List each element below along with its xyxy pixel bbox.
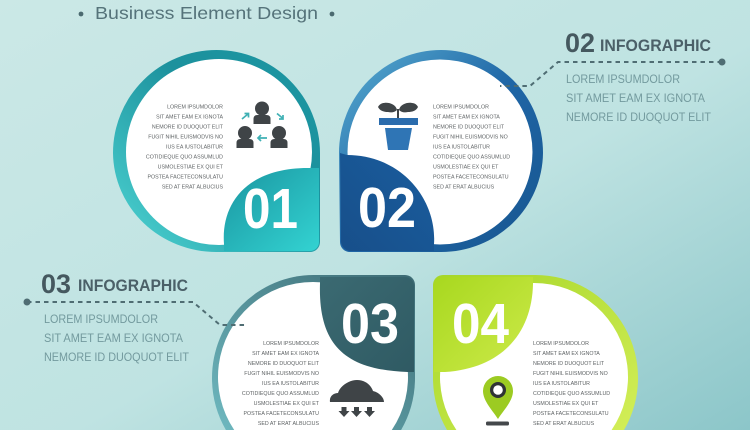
text block 04: SED AT ERAT ALBUCIUS: [533, 421, 595, 427]
panel 02: [339, 50, 543, 252]
text block 03: [242, 341, 320, 427]
callout 03: 03: [41, 269, 71, 299]
text block 03: COTIDIEQUE QUO ASSUMLUD: [242, 391, 319, 397]
panel 01: [113, 50, 320, 252]
connector 02: [500, 62, 722, 86]
text block 01: COTIDIEQUE QUO ASSUMLUD: [146, 154, 223, 160]
text block 03: SED AT ERAT ALBUCIUS: [258, 421, 319, 427]
text block 02: IUS EA IUSTOLABITUR: [433, 144, 490, 150]
text block 04: USMOLESTIAE EX QUI ET: [533, 401, 599, 407]
callout 03: LOREM IPSUMDOLOR: [44, 312, 158, 326]
text block 03: NEMORE ID DUOQUOT ELIT: [248, 361, 320, 367]
number 03: 03: [341, 292, 399, 356]
number 04: 04: [452, 292, 509, 356]
callout 02: LOREM IPSUMDOLOR: [566, 72, 680, 86]
text block 03: IUS EA IUSTOLABITUR: [262, 381, 319, 387]
text block 04: [533, 341, 610, 427]
text block 04: FUGIT NIHIL EUISMODVIS NO: [533, 371, 608, 377]
text block 01: USMOLESTIAE EX QUI ET: [158, 164, 224, 170]
icon: plant pot: [378, 103, 418, 150]
callout 02: SIT AMET EAM EX IGNOTA: [566, 91, 705, 105]
panel 04: [433, 275, 638, 430]
callout 02: NEMORE ID DUOQUOT ELIT: [566, 110, 712, 124]
text block 02: NEMORE ID DUOQUOT ELIT: [433, 124, 505, 130]
panel 03: [212, 275, 415, 430]
text block 04: POSTEA FACETECONSULATU: [533, 411, 609, 417]
text block 01: IUS EA IUSTOLABITUR: [166, 144, 223, 150]
text block 02: SIT AMET EAM EX IGNOTA: [433, 114, 500, 120]
icon: map pin: [483, 376, 513, 426]
text block 02: SED AT ERAT ALBUCIUS: [433, 184, 495, 190]
text block 01: SIT AMET EAM EX IGNOTA: [156, 114, 223, 120]
text block 02: USMOLESTIAE EX QUI ET: [433, 164, 499, 170]
text block 04: COTIDIEQUE QUO ASSUMLUD: [533, 391, 610, 397]
callout 02: [500, 28, 726, 124]
connector 03: [27, 302, 248, 325]
text block 01: NEMORE ID DUOQUOT ELIT: [152, 124, 224, 130]
title: Business Element Design: [95, 3, 318, 23]
text block 03: POSTEA FACETECONSULATU: [243, 411, 319, 417]
text block 04: SIT AMET EAM EX IGNOTA: [533, 351, 600, 357]
number 02: 02: [358, 176, 416, 240]
callout 02: INFOGRAPHIC: [600, 37, 711, 55]
text block 01: FUGIT NIHIL EUISMODVIS NO: [148, 134, 223, 140]
tab 03: [320, 277, 414, 372]
text block 01: POSTEA FACETECONSULATU: [147, 174, 223, 180]
text block 03: SIT AMET EAM EX IGNOTA: [252, 351, 319, 357]
text block 01: [146, 104, 224, 190]
tab 01: [224, 168, 319, 251]
icon: people cycle: [236, 102, 288, 148]
text block 02: COTIDIEQUE QUO ASSUMLUD: [433, 154, 510, 160]
text block 01: SED AT ERAT ALBUCIUS: [162, 184, 223, 190]
callout 02: 02: [565, 28, 595, 58]
text block 03: LOREM IPSUMDOLOR: [263, 341, 319, 347]
icon: cloud download: [330, 380, 384, 417]
text block 03: USMOLESTIAE EX QUI ET: [254, 401, 320, 407]
text block 02: LOREM IPSUMDOLOR: [433, 104, 489, 110]
text block 02: FUGIT NIHIL EUISMODVIS NO: [433, 134, 508, 140]
text block 03: FUGIT NIHIL EUISMODVIS NO: [244, 371, 319, 377]
text block 02: [433, 104, 510, 190]
callout 03: [24, 269, 248, 364]
tab 02: [340, 153, 434, 251]
callout 03: INFOGRAPHIC: [78, 277, 188, 295]
number 01: 01: [243, 177, 298, 241]
text block 04: NEMORE ID DUOQUOT ELIT: [533, 361, 605, 367]
tab 04: [434, 277, 533, 372]
text block 04: LOREM IPSUMDOLOR: [533, 341, 589, 347]
text block 01: LOREM IPSUMDOLOR: [167, 104, 223, 110]
callout 03: SIT AMET EAM EX IGNOTA: [44, 331, 183, 345]
text block 04: IUS EA IUSTOLABITUR: [533, 381, 590, 387]
callout 03: NEMORE ID DUOQUOT ELIT: [44, 350, 190, 364]
text block 02: POSTEA FACETECONSULATU: [433, 174, 509, 180]
